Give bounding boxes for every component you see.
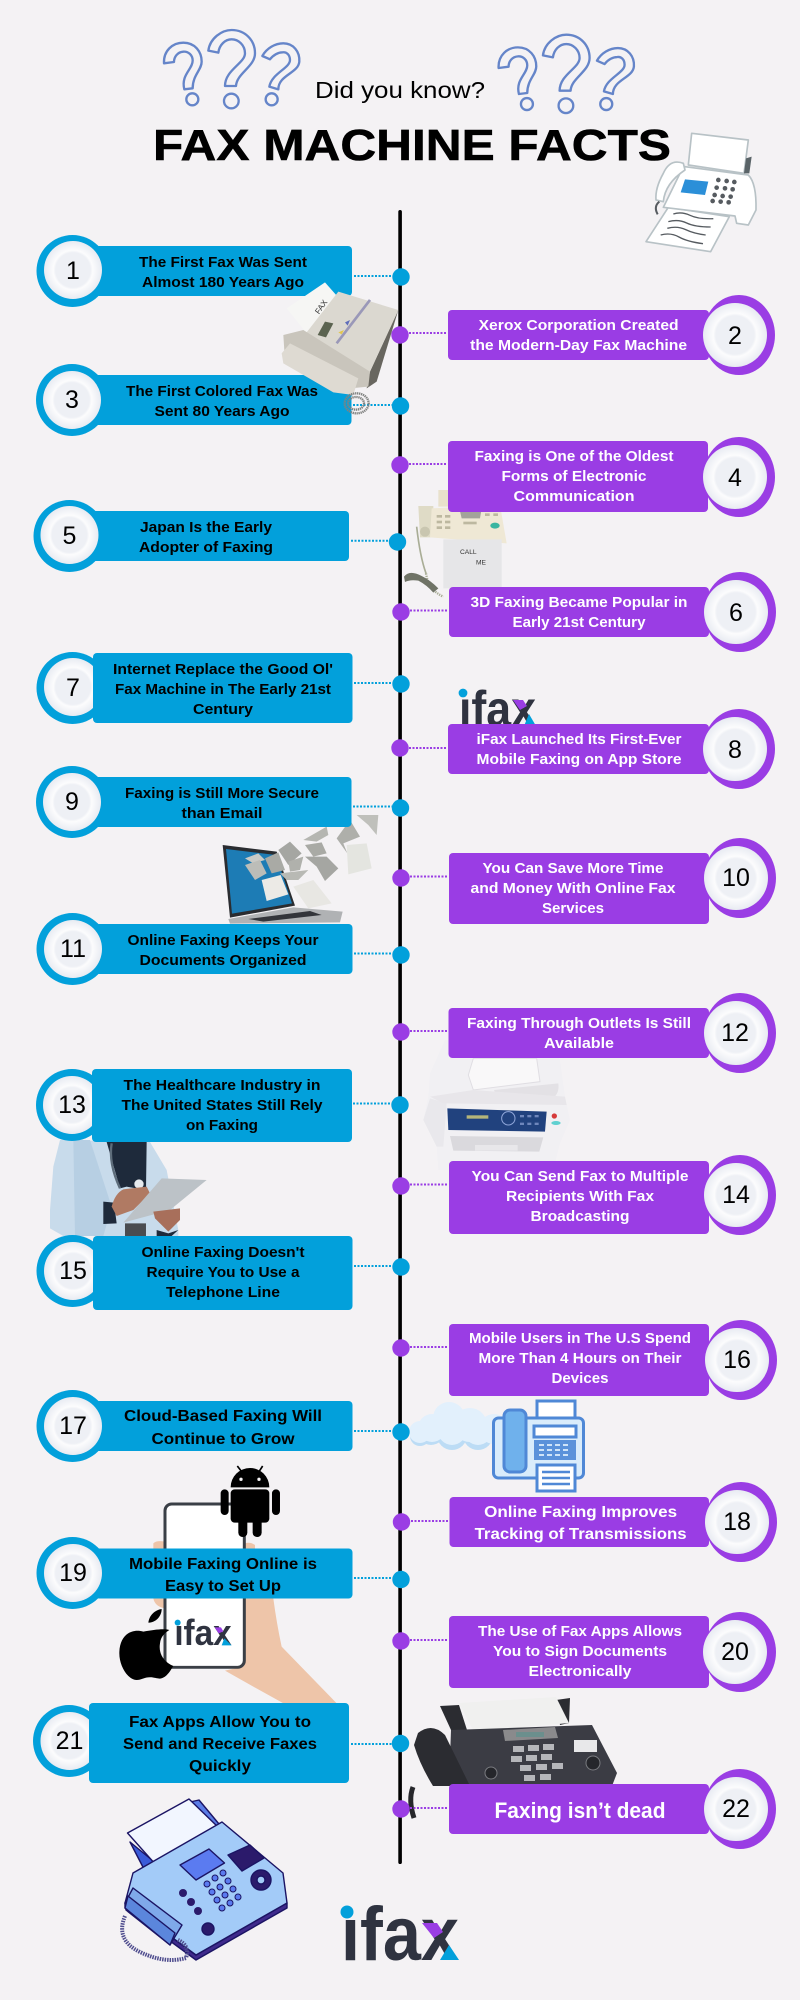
fact 17 text: Continue to Grow — [152, 1431, 295, 1448]
fact 11 text: Online Faxing Keeps Your — [128, 933, 319, 949]
badge 6 — [704, 580, 768, 644]
illustration: cloud — [409, 1402, 509, 1450]
fact 4 text — [474, 449, 674, 505]
connector 6 — [392, 603, 448, 621]
fact 17 text: Cloud-Based Faxing Will — [124, 1408, 322, 1425]
fact 8 text: Mobile Faxing on App Store — [476, 752, 682, 768]
fact 21 text — [123, 1714, 317, 1775]
fact 6 text: Early 21st Century — [512, 615, 646, 631]
connector 11 — [354, 946, 410, 964]
fact 18 text — [475, 1504, 687, 1543]
connector 7 — [354, 675, 410, 693]
fact 13 text — [122, 1078, 322, 1134]
fact 13 — [36, 1069, 409, 1142]
connector 12 — [392, 1023, 448, 1041]
logo: ifax small: ifax — [459, 681, 536, 737]
connector 17 — [354, 1423, 410, 1441]
fact 18 text: Online Faxing Improves — [484, 1504, 677, 1521]
fact 10 — [392, 838, 776, 924]
photo: laptop with flying envelopes — [223, 815, 378, 924]
badge 3: 3 — [65, 386, 79, 414]
fact 1 text — [139, 255, 307, 291]
fact 9 text: Faxing is Still More Secure — [125, 786, 319, 802]
badge 1: 1 — [66, 257, 80, 285]
connector 10 — [392, 869, 448, 887]
badge 18 — [705, 1490, 769, 1554]
badge 11: 11 — [60, 935, 86, 963]
fact 19 text: Easy to Set Up — [165, 1578, 281, 1595]
fact 6 — [392, 572, 776, 652]
fact 8 text — [476, 732, 682, 768]
fact 19 text: Mobile Faxing Online is — [129, 1556, 317, 1573]
question marks left — [164, 30, 299, 108]
fact 21 text: Send and Receive Faxes — [123, 1736, 317, 1753]
fact 15 text — [142, 1245, 305, 1301]
badge 5: 5 — [63, 522, 76, 550]
fact 6 text — [470, 595, 688, 631]
fact 17 — [36, 1390, 410, 1462]
fact 2 text: Xerox Corporation Created — [479, 318, 679, 334]
fact 5 text: Adopter of Faxing — [139, 540, 273, 556]
badge 4: 4 — [728, 464, 742, 492]
fact 9 text — [125, 786, 319, 822]
fact 16 text: Mobile Users in The U.S Spend — [469, 1331, 691, 1347]
fact 15 text: Online Faxing Doesn't — [142, 1245, 305, 1261]
badge 9: 9 — [65, 788, 79, 816]
badge 8: 8 — [728, 736, 742, 764]
fact 16 text: Devices — [552, 1371, 608, 1387]
badge 20 — [703, 1620, 767, 1684]
badge 12: 12 — [721, 1019, 749, 1047]
fact 15 — [36, 1235, 410, 1310]
fact 3 text — [126, 384, 318, 420]
fact 10 text — [470, 861, 676, 917]
badge 4 — [703, 445, 767, 509]
connector 20 — [392, 1632, 448, 1650]
fact 5 — [34, 500, 406, 572]
fact 3 text: Sent 80 Years Ago — [154, 404, 290, 420]
badge 11 — [44, 920, 102, 978]
fact 21 text: Quickly — [189, 1758, 251, 1775]
fact 7 text: Century — [193, 702, 253, 718]
fact 2 text: the Modern-Day Fax Machine — [470, 338, 687, 354]
fact 16 — [392, 1320, 777, 1400]
fact 18 — [393, 1482, 777, 1562]
fact 4 text: Communication — [514, 489, 634, 505]
fact 19 — [36, 1537, 410, 1609]
fact 8 — [391, 709, 775, 789]
fact 5 text — [139, 520, 273, 556]
photo: white multifunction printer — [423, 1040, 570, 1170]
connector 5 — [351, 533, 406, 551]
badge 14: 14 — [722, 1181, 750, 1209]
question marks right — [499, 35, 634, 113]
badge 21 — [40, 1712, 98, 1770]
timeline — [398, 210, 402, 1864]
fact 13 text: The Healthcare Industry in — [124, 1078, 320, 1094]
badge 17: 17 — [59, 1412, 87, 1440]
fact 10 text: Services — [542, 901, 604, 917]
fact 21 — [33, 1703, 409, 1783]
connector 9 — [353, 799, 409, 817]
fact 20 — [392, 1612, 776, 1692]
badge 15: 15 — [59, 1257, 87, 1285]
icon: illustrated fax top right — [646, 133, 756, 252]
fact 12 text: Available — [544, 1036, 614, 1052]
badge 14 — [704, 1163, 768, 1227]
badge 16 — [705, 1328, 769, 1392]
fact 14 text — [472, 1169, 688, 1225]
fact 10 text: You Can Save More Time — [482, 861, 664, 877]
badge 9 — [43, 773, 101, 831]
fact 12 text: Faxing Through Outlets Is Still — [467, 1016, 691, 1032]
fact 16 text: More Than 4 Hours on Their — [478, 1351, 682, 1367]
fact 22 — [392, 1769, 776, 1849]
fact 6 text: 3D Faxing Became Popular in — [470, 595, 688, 611]
fact 1 text: Almost 180 Years Ago — [142, 275, 304, 291]
fact 10 text: and Money With Online Fax — [470, 881, 676, 897]
fact 11 — [36, 913, 410, 985]
fact 18 text: Tracking of Transmissions — [475, 1526, 687, 1543]
badge 12 — [704, 1001, 768, 1065]
badge 7: 7 — [66, 674, 80, 702]
fact 9 text: than Email — [182, 806, 262, 822]
fact 4 text: Forms of Electronic — [502, 469, 646, 485]
badge 8 — [703, 717, 767, 781]
connector 21 — [351, 1735, 409, 1752]
badge 19 — [44, 1544, 102, 1602]
connector 19 — [354, 1571, 410, 1588]
photo: hand holding phone with logos — [119, 1466, 337, 1703]
badge 21: 21 — [56, 1727, 83, 1755]
photo: hand holding phone with logos: ifax — [174, 1612, 232, 1653]
connector 4 — [391, 456, 447, 474]
fact 4 — [391, 437, 775, 517]
badge 2: 2 — [728, 322, 742, 350]
photo: doctor with tablet — [50, 1140, 207, 1236]
fact 22 text: Faxing isn’t dead — [494, 1798, 666, 1823]
badge 18: 18 — [723, 1508, 751, 1536]
badge 1 — [44, 241, 102, 299]
fact 20 text: The Use of Fax Apps Allows — [478, 1624, 682, 1640]
fact 5 text: Japan Is the Early — [140, 520, 272, 536]
fact 9 — [36, 766, 409, 838]
connector 15 — [354, 1258, 410, 1276]
badge 22 — [704, 1777, 768, 1841]
fact 11 text: Documents Organized — [140, 953, 306, 969]
fact 1 — [36, 235, 410, 307]
illustration: blue fax bottom — [122, 1799, 287, 1960]
fact 15 text: Require You to Use a — [146, 1265, 300, 1281]
fact 7 — [36, 652, 410, 724]
photo: beige fax with call me paper: ME — [476, 560, 487, 567]
fact 2 — [391, 295, 775, 375]
connector 14 — [392, 1177, 448, 1195]
fact 8 text: iFax Launched Its First-Ever — [476, 732, 682, 748]
connector 2 — [391, 326, 447, 344]
fact 20 text: Electronically — [528, 1664, 632, 1680]
connector 13 — [353, 1096, 409, 1114]
fact 13 text: The United States Still Rely — [122, 1098, 322, 1114]
fact 2 text — [470, 318, 687, 354]
fact 19 text — [129, 1556, 317, 1595]
fact 7 text: Internet Replace the Good Ol' — [113, 662, 333, 678]
connector 16 — [392, 1339, 448, 1357]
fact 3 — [36, 364, 409, 436]
fact 21 text: Fax Apps Allow You to — [129, 1714, 311, 1731]
fact 16 text — [469, 1331, 691, 1387]
fact 17 text — [124, 1408, 322, 1448]
badge 6: 6 — [729, 599, 743, 627]
badge 15 — [44, 1242, 102, 1300]
photo: beige fax with call me paper — [404, 490, 507, 597]
fact 3 text: The First Colored Fax Was — [126, 384, 318, 400]
photo: dark fax machine — [411, 1697, 617, 1818]
badge 10: 10 — [722, 864, 750, 892]
fact 20 text: You to Sign Documents — [493, 1644, 667, 1660]
badge 5 — [40, 506, 98, 564]
fact 14 — [392, 1155, 776, 1235]
title: FAX MACHINE FACTS — [153, 121, 671, 170]
connector 3 — [353, 397, 409, 415]
badge 19: 19 — [59, 1559, 87, 1587]
fact 7 text: Fax Machine in The Early 21st — [115, 682, 331, 698]
badge 17 — [44, 1397, 102, 1455]
fact 14 text: You Can Send Fax to Multiple — [472, 1169, 688, 1185]
fact 13 text: on Faxing — [186, 1118, 258, 1134]
badge 22: 22 — [722, 1795, 750, 1823]
connector 22 — [392, 1800, 448, 1818]
fact 1 text: The First Fax Was Sent — [139, 255, 307, 271]
badge 3 — [43, 371, 101, 429]
badge 13 — [43, 1076, 101, 1134]
badge 16: 16 — [723, 1346, 751, 1374]
fact 20 text — [478, 1624, 682, 1680]
fact 14 text: Recipients With Fax — [506, 1189, 654, 1205]
logo: ifax bottom: ifax — [341, 1892, 459, 1977]
illustration: blue fax icon — [494, 1401, 584, 1491]
badge 2 — [703, 303, 767, 367]
subtitle: Did you know? — [315, 77, 485, 103]
badge 20: 20 — [721, 1638, 749, 1666]
connector 18 — [393, 1513, 449, 1531]
fact 7 text — [113, 662, 333, 718]
fact 12 text — [467, 1016, 691, 1052]
connector 1 — [354, 268, 410, 286]
photo: beige fax with call me paper: CALL — [460, 549, 477, 556]
badge 7 — [44, 658, 102, 716]
badge 10 — [704, 846, 768, 910]
photo: beige fax machine with FAX paper: FAX — [313, 298, 330, 316]
connector 8 — [391, 739, 447, 757]
badge 13: 13 — [58, 1091, 86, 1119]
fact 4 text: Faxing is One of the Oldest — [474, 449, 674, 465]
fact 15 text: Telephone Line — [166, 1285, 280, 1301]
photo: beige fax machine with FAX paper — [282, 282, 398, 413]
fact 11 text — [128, 933, 319, 969]
fact 12 — [392, 993, 776, 1073]
fact 14 text: Broadcasting — [530, 1209, 630, 1225]
